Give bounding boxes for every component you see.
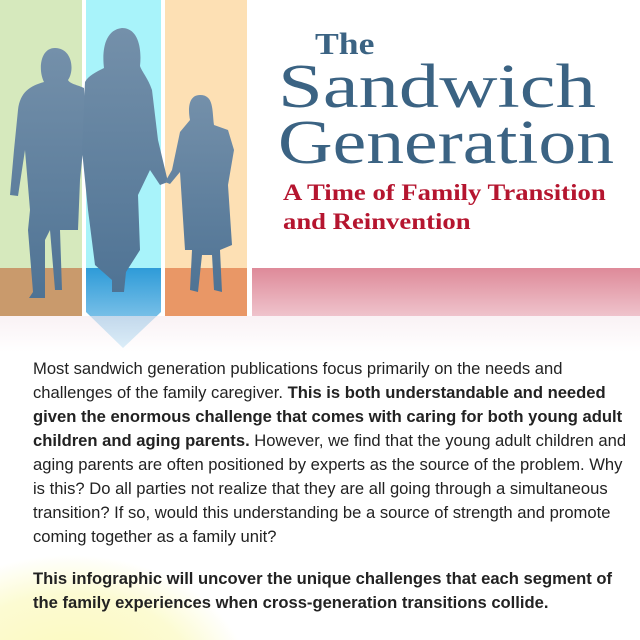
subtitle: A Time of Family Transition: [283, 180, 606, 205]
intro paragraph: is this? Do all parties not realize that they are all going through a simultaneous: [33, 479, 608, 498]
column: green: [0, 0, 82, 316]
closing statement: This infographic will uncover the unique challenges that each segment of: [33, 569, 612, 588]
intro paragraph: challenges of the family caregiver. This is both understandable and needed: [33, 383, 606, 402]
silhouette: mother: [82, 28, 168, 292]
intro paragraph: children and aging parents. However, we find that the young adult children and: [33, 431, 626, 450]
closing statement: [33, 569, 612, 612]
intro paragraph: given the enormous challenge that comes with caring for both young adult: [33, 407, 622, 426]
intro paragraph: transition? If so, would this understanding be a source of strength and promote: [33, 503, 610, 522]
silhouette: grandmother: [10, 48, 86, 298]
column: blue arrow: [86, 0, 161, 348]
title: The: [315, 26, 374, 61]
subtitle: and Reinvention: [283, 209, 471, 234]
header graphic: [0, 0, 640, 348]
background: yellow glow: [0, 540, 300, 640]
pink band: [252, 268, 640, 316]
intro paragraph: aging parents are often positioned by experts as the source of the problem. Why: [33, 455, 622, 474]
intro paragraph: coming together as a family unit?: [33, 527, 277, 546]
title: Sandwich: [278, 53, 596, 121]
silhouette: child: [165, 95, 234, 292]
closing statement: the family experiences when cross-generation transitions collide.: [33, 593, 548, 612]
title: [278, 26, 614, 177]
intro paragraph: [33, 359, 626, 546]
column: orange: [165, 0, 247, 316]
title: Generation: [278, 109, 614, 177]
subtitle: [283, 180, 606, 234]
intro paragraph: Most sandwich generation publications focus primarily on the needs and: [33, 359, 562, 378]
